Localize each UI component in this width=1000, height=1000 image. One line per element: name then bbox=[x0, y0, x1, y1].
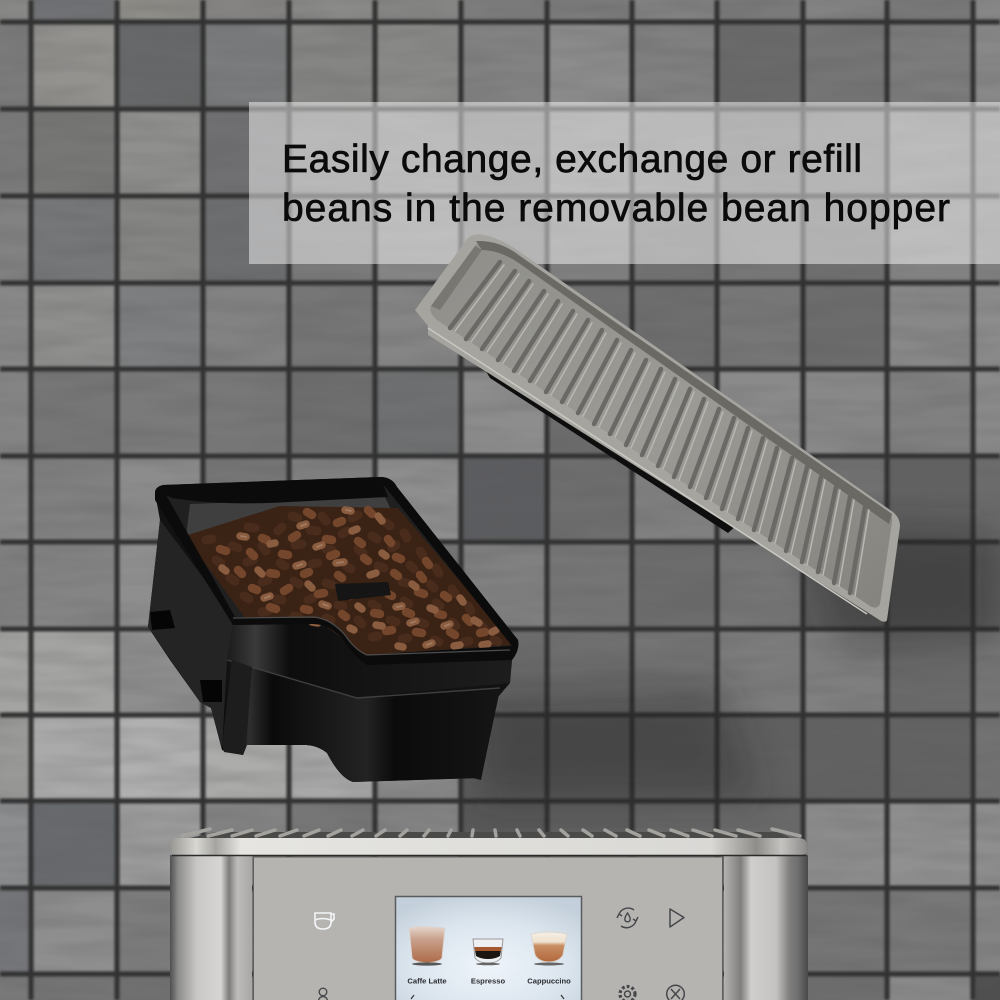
icon: play bbox=[670, 909, 684, 927]
coffee machine bbox=[170, 829, 808, 1000]
icon: person bbox=[318, 988, 328, 1000]
touchscreen bbox=[396, 896, 582, 1000]
icon: cancel bbox=[667, 985, 684, 1000]
drink: espresso bbox=[473, 939, 503, 965]
hopper centre latch bbox=[335, 582, 391, 601]
machine top cap bbox=[171, 838, 807, 855]
screen arrows bbox=[411, 995, 564, 999]
lid outer flange bbox=[415, 234, 900, 622]
drink labels: Espresso bbox=[471, 976, 505, 986]
machine control panel bbox=[254, 857, 722, 1000]
icon: settings gear bbox=[620, 986, 635, 1000]
hopper front leg bbox=[222, 660, 252, 755]
drink labels: Caffe Latte bbox=[407, 976, 447, 986]
lid ribs bbox=[450, 262, 869, 596]
machine left steel side bbox=[170, 855, 252, 1000]
caption heading: beans in the removable bean hopper bbox=[282, 187, 950, 230]
shadows cast on the wall bbox=[470, 520, 1000, 800]
hopper rim highlight bbox=[155, 477, 518, 665]
hopper outer body bbox=[148, 477, 518, 782]
caption panel bbox=[249, 102, 1000, 264]
hopper rim band bbox=[227, 618, 512, 697]
hopper lid bbox=[415, 234, 900, 622]
bean hopper bbox=[148, 477, 518, 782]
drink labels: Cappuccino bbox=[527, 976, 571, 986]
icon: cup (lit) bbox=[315, 913, 334, 929]
hopper inner walls bbox=[166, 484, 512, 655]
hopper lower front bbox=[222, 660, 500, 782]
icon: rinse cycle bbox=[617, 908, 638, 928]
drink labels bbox=[407, 976, 571, 986]
drink: caffe latte bbox=[409, 926, 445, 966]
hopper left side face bbox=[148, 520, 235, 747]
caption heading: Easily change, exchange or refill bbox=[282, 138, 862, 181]
coffee beans bbox=[188, 508, 510, 653]
lid inner tray bbox=[430, 242, 892, 608]
machine top vent grille bbox=[182, 829, 800, 838]
machine right steel side bbox=[724, 855, 808, 1000]
drink: cappuccino bbox=[531, 932, 567, 966]
